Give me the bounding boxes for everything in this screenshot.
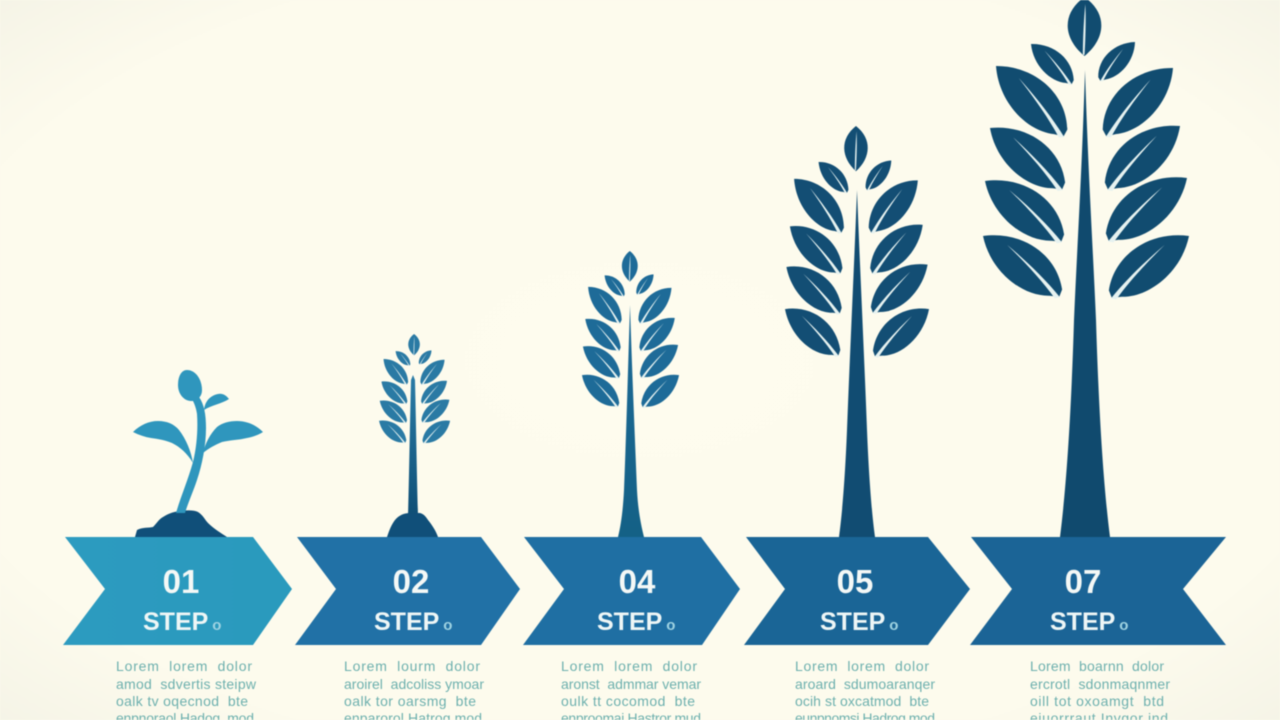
step 01 ribbon <box>63 537 292 645</box>
step 02 number: 02 <box>393 563 429 600</box>
step 05 description: ocih st oxcatmod bte <box>795 693 929 709</box>
icon: tall tree, stage 5 <box>971 0 1201 537</box>
step 04 description: Lorem lorem dolor <box>561 658 697 674</box>
step 04 number: 04 <box>619 563 656 600</box>
step 01 description <box>116 658 257 720</box>
step 02 description <box>344 658 484 720</box>
step 01 description: oalk tv oqecnod bte <box>116 693 248 709</box>
step 05 description: Lorem lorem dolor <box>795 658 929 674</box>
step 02 description: oalk tor oarsmg bte <box>344 693 476 709</box>
step 02 description: Lorem lourm dolor <box>344 658 480 674</box>
step 07 number: 07 <box>1065 563 1101 600</box>
icon: tree, stage 4 <box>777 126 938 537</box>
step 07 description <box>1030 658 1170 720</box>
step 04 description: aronst admmar vemar <box>561 676 701 692</box>
step 07 description: ercrotl sdonmaqnmer <box>1030 676 1170 692</box>
step 07 ribbon <box>970 537 1226 645</box>
icon: young tree, stage 2 <box>375 334 454 537</box>
step 02 description: aroirel adcoliss ymoar <box>344 676 484 692</box>
icon: tree, stage 3 <box>576 251 685 537</box>
step 01 description: amod sdvertis steipw <box>116 676 257 692</box>
step 07 description: oill tot oxoamgt btd <box>1030 693 1164 709</box>
step 04 ribbon <box>523 537 740 645</box>
step 01 description: Lorem lorem dolor <box>116 658 252 674</box>
step 02 ribbon <box>295 537 520 645</box>
step 04 description: oulk tt cocomod bte <box>561 693 695 709</box>
step 01 label: STEP o <box>143 608 221 636</box>
step 05 description <box>795 658 935 720</box>
step 04 label: STEP o <box>597 608 675 636</box>
step 05 description: aroard sdumoaranqer <box>795 676 935 692</box>
step 04 description <box>561 658 701 720</box>
step 05 number: 05 <box>837 563 873 600</box>
step 07 label: STEP o <box>1050 608 1128 636</box>
step 07 description: Lorem boarnn dolor <box>1030 658 1164 674</box>
step 05 ribbon <box>744 537 970 645</box>
step 05 label: STEP o <box>820 608 898 636</box>
step 02 label: STEP o <box>374 608 452 636</box>
step 01 number: 01 <box>163 563 199 600</box>
icon: sprout with soil, stage 1 <box>133 370 263 537</box>
